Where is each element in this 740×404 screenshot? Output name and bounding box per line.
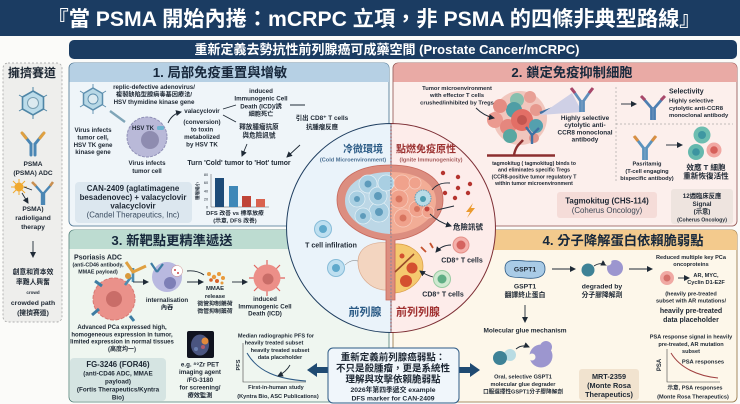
icon: effector T cells <box>688 126 722 160</box>
panel 3: new target precise delivery <box>69 230 389 402</box>
bar chart: DFS: (示意, DFS 改善) <box>213 217 257 225</box>
text: selectivity: monoclonal antibody <box>669 113 729 119</box>
text: effector T cells: 效應 T 細胞 <box>686 163 726 172</box>
text: PET imaging: /FG-3180 <box>187 377 214 384</box>
callout: 12-week signal: (示意) <box>694 206 710 216</box>
callout: 12-week signal <box>671 189 733 224</box>
callout: MRT-2359: (Monte Rosa <box>587 381 632 390</box>
text: radioligand therapy: PSMA) <box>22 206 44 213</box>
icon: degrader complex <box>582 258 623 276</box>
text: oral degrader: Oral, selective GSPT1 <box>494 374 552 380</box>
icon: CCR8 antibody <box>571 88 593 112</box>
panel 1: local immune reset <box>69 63 389 226</box>
text: danger signal: 危險訊號 <box>453 222 483 232</box>
arrow <box>232 281 247 283</box>
text: cold to hot: Turn 'Cold' tumor to 'Hot' tumor <box>187 160 291 167</box>
heading: cold: 冷微環境 <box>343 142 383 156</box>
text: PFS caption: data placeholder <box>258 355 303 361</box>
callout: Tagmokitug <box>557 192 657 218</box>
callout: Tagmokitug: (Coherus Oncology) <box>572 206 643 215</box>
label: prostate right: 前列列腺 <box>396 304 440 318</box>
arrow <box>420 271 433 277</box>
icon: lightning <box>466 203 475 218</box>
text: cold english: (Cold Microenvironment) <box>320 158 386 164</box>
icon: tumor cell with HSV TK <box>127 117 167 157</box>
text: oral degrader: 口服選擇性GSPT1分子膠降解劑 <box>483 388 563 396</box>
text: vector: HSV thymidine kinase gene <box>114 99 195 106</box>
icon: cell <box>660 271 674 285</box>
text: expression: limited expression in normal tissues <box>70 340 175 346</box>
arrow <box>168 112 181 123</box>
text: induced ICD: Death (ICD) <box>248 311 282 318</box>
text: tumor cell: tumor cell <box>132 168 162 175</box>
text: oral degrader: molecular glue degrader <box>491 382 556 388</box>
callout: 12-week signal: Signal <box>693 201 712 208</box>
arrow <box>621 103 636 105</box>
text: induced ICD: Death (ICD)/誘 <box>240 102 283 110</box>
bar chart: DFS: 40 <box>204 190 208 194</box>
text: valacyclovir: (conversion) <box>183 119 221 126</box>
text: virus infects: HSV TK gene <box>74 142 113 149</box>
icon: tumor cell with ADC <box>92 262 146 321</box>
text: highly selective: CCR8 monoclonal <box>557 129 613 136</box>
icon: syringe <box>110 111 125 122</box>
text: tumor microenvironment: crushed/inhibited by Tregs <box>420 100 494 106</box>
bar chart: DFS: 20 <box>204 198 208 202</box>
callout: FG-3246: Bio) <box>112 394 124 401</box>
icon: molecular glue <box>493 341 552 368</box>
text: Pasritamig: (T-cell engaging <box>625 169 669 175</box>
callout: MRT-2359: MRT-2359 <box>592 372 626 381</box>
callout: center message <box>328 348 459 403</box>
heading: 2. 鎖定免疫抑制細胞 <box>511 64 633 80</box>
text: highly selective: Highly selective <box>561 115 609 122</box>
text: PFS caption: Median radiographic PFS for <box>238 334 314 340</box>
text: PSA caption: subset <box>682 349 700 355</box>
title banner <box>0 0 740 36</box>
icon: prostate left lobe <box>358 243 388 290</box>
bar chart: DFS <box>194 173 269 225</box>
arrow <box>666 144 682 146</box>
subtitle bar <box>69 40 737 59</box>
text: expression: homogeneous expression in tumor, <box>71 332 173 338</box>
arrows: to T cell response <box>287 105 305 157</box>
text: valacyclovir: to toxin <box>191 126 213 133</box>
text: tumor microenvironment: with effector T cells <box>429 93 484 99</box>
text: induced ICD: induced <box>249 88 273 95</box>
text: radioligand therapy: radioligand <box>15 215 51 222</box>
text: Psoriasis ADC: MMAE payload) <box>78 270 118 276</box>
text: vector: replic-defective adenovirus/ <box>113 84 195 91</box>
icon: dying cell <box>249 260 285 296</box>
icon: Pasritamig antibody <box>634 136 656 160</box>
text: selectivity: cytolytic anti-CCR8 <box>669 106 724 112</box>
arrow <box>436 245 451 252</box>
arrow <box>552 268 575 270</box>
heading: 1. 局部免疫重置與增敏 <box>153 64 287 80</box>
arrow: right from callout <box>459 363 480 377</box>
callout: 12-week signal: (Coherus Oncology) <box>677 218 727 224</box>
icon: tumor cell with HSV TK: HSV TK <box>132 126 155 132</box>
icon: T cell <box>314 220 332 238</box>
text: crowded path: 率難人興奮 <box>16 277 50 286</box>
text: antigen release: 與危險訊號 <box>243 131 276 140</box>
arrow <box>133 281 148 283</box>
bar chart: DFS: 0 <box>206 206 208 210</box>
text: CD8 T cells lower: CD8⁺ T cells <box>422 292 464 298</box>
text: MMAE release: 微管抑制藥荷 <box>197 299 233 307</box>
text: PET imaging: 療效監測 <box>188 391 212 399</box>
text: PFS caption: heavily treated subset <box>245 341 304 347</box>
callout: FG-3246: (anti-CD46 ADC, MMAE <box>83 370 153 377</box>
text: reduced oncoproteins: Reduced multiple key PCa <box>656 255 726 261</box>
callout: Tagmokitug: Tagmokitug (CHS-114) <box>565 196 649 206</box>
text: internalisation: internalisation <box>146 297 188 304</box>
icon: stem and bar <box>487 140 555 156</box>
icon: selective antibody <box>641 96 665 120</box>
red signal dots <box>441 171 472 200</box>
callout: center message: DFS marker for CAN-2409 <box>351 396 435 402</box>
icon: T cell lower <box>328 260 358 276</box>
text: induced ICD: Immunogenic Cell <box>238 303 292 310</box>
text: CD8 response: 引出 CD8⁺ T cells <box>296 115 348 122</box>
center dashed line <box>390 124 392 332</box>
heading: 3. 新靶點更精準遞送 <box>111 232 233 248</box>
callout: FG-3246: payload) <box>105 378 131 385</box>
text: degraded by: degraded by <box>582 284 622 290</box>
panel: crowded race track: 擁擠賽道 <box>8 65 56 80</box>
text: CD8 T cells upper: CD8⁺ T cells <box>441 258 483 264</box>
icon: tumors in lobe <box>395 243 433 287</box>
callout: center message: 重新定義前列腺癌弱點： <box>341 352 445 364</box>
text: PSMA ADC: (PSMA) ADC <box>13 170 53 177</box>
bar chart: DFS: DFS 改善 vs 標準放療 <box>206 211 264 217</box>
text: PSA footnote: (Monte Rosa Therapeutics) <box>657 394 729 400</box>
central circle: prostate <box>287 124 495 332</box>
text: heavily pretreated: data placeholder <box>663 317 719 324</box>
text: heavily pretreated: (heavily pre-treated <box>665 292 717 298</box>
icon: bound antibody <box>526 108 553 144</box>
arrows: signal <box>430 183 454 226</box>
text: crowded path: 創意和資本效 <box>13 269 53 276</box>
text: virus infects: tumor cell, <box>77 134 109 141</box>
line chart: PSA: PSA <box>657 358 663 371</box>
text: vector: 複製缺陷型腺病毒基因療法/ <box>116 91 192 99</box>
text: virus infects: kinase gene <box>75 149 111 156</box>
text: highly selective: cytolytic anti- <box>564 122 606 129</box>
text: induced ICD: induced <box>253 296 277 303</box>
arrow <box>629 268 652 270</box>
arrows: to MMAE <box>187 271 204 282</box>
text: expression: (高度均一) <box>108 345 136 353</box>
icon: PSMA ADC antibody <box>22 133 44 155</box>
text: valacyclovir: metabolized <box>184 134 220 141</box>
subtitle bar: 重新定義去勢抗性前列腺癌可成藥空間 (Prostate Cancer/mCRPC) <box>194 42 580 57</box>
text: PSA caption: pre-treated, AR mutation <box>658 342 724 348</box>
text: T cell infiltration: T cell infilration <box>305 242 357 250</box>
text: Pasritamig: bispecific antibody) <box>620 176 674 182</box>
heading: ignite: 點燃免疫原性 <box>396 142 456 156</box>
text: MMAE release: MMAE <box>206 286 224 292</box>
text: PSMA ADC: PSMA <box>23 161 43 168</box>
text: Psoriasis ADC: (anti-CD46 antibody, <box>72 262 124 268</box>
text: degraded by: 分子膠降解劑 <box>582 290 623 299</box>
text: glue mechanism: Molecular glue mechanism <box>483 328 567 334</box>
text: first in human: (Kyntra Bio, ASC Publications) <box>237 394 319 400</box>
arrow <box>524 305 526 322</box>
text: virus infects: Virus infects <box>74 127 112 134</box>
text: first in human: First-in-human study <box>248 385 304 391</box>
panel: crowded race track <box>3 63 62 322</box>
text: CD8 response: 抗腫瘤反應 <box>306 122 339 131</box>
text: PSA footnote: 示意, PSA responses <box>667 386 723 392</box>
icon: internalisation cell <box>151 262 182 292</box>
text: GSPT1: GSPT1 <box>514 284 536 290</box>
text: tumor cell: Virus infects <box>128 160 166 167</box>
text: crowded path: crowd <box>26 290 40 295</box>
callout: FG-3246 <box>70 358 166 401</box>
arrow <box>678 277 689 279</box>
icon: GSPT1 protein <box>505 260 545 278</box>
callout: center message: 理解與攻擊依賴脆弱點 <box>345 374 441 386</box>
text: heavily pretreated: subset with AR mutations/ <box>656 299 726 305</box>
text: selectivity: Highly selective <box>669 98 714 104</box>
text: valacyclovir: valacyclovir <box>184 108 220 115</box>
text: PET imaging: imaging agent <box>179 369 221 376</box>
text: heavily pretreated: heavily pre-treated <box>660 308 722 315</box>
bar chart: DFS: 60 <box>204 181 208 185</box>
text: internalisation: 內吞 <box>161 304 174 312</box>
callout: FG-3246: (Fortis Therapeutics/Kyntra <box>77 386 160 393</box>
text: AR MYC: AR, MYC, <box>693 273 719 279</box>
icon: prostate right lobe <box>395 244 423 293</box>
panel 4: molecular glue <box>393 230 737 402</box>
icon: GSPT1 protein: GSPT1 <box>514 266 536 274</box>
text: induced ICD: 細胞死亡 <box>249 110 273 118</box>
text: Pasritamig: Pasritamig <box>632 162 662 168</box>
text: AR MYC: Cyclin D1-E2F <box>687 280 725 286</box>
text: tagmokitug mechanism: (CCR8-positive tumor regulatory T <box>492 174 577 180</box>
line chart: PFS: PFS <box>236 359 242 370</box>
icon: virus <box>80 84 106 114</box>
text: MMAE release: release <box>205 294 226 300</box>
text: antigen release: 釋放腫瘤抗原 <box>239 124 279 131</box>
callout: center message: 不只是殺腫瘤，更是系統性 <box>336 362 450 374</box>
callout: CAN-2409: besadenovec) + valacyclovir <box>80 193 186 202</box>
callout: CAN-2409: CAN-2409 (aglatimagene <box>87 184 179 193</box>
text: selectivity: Selectivity <box>669 88 704 96</box>
icon: PET scan <box>187 331 214 358</box>
callout: FG-3246: FG-3246 (FOR46) <box>86 360 150 369</box>
text: selectivity <box>669 88 729 119</box>
icon: red CD8 cell <box>453 237 469 253</box>
text: valacyclovir: by HSV TK <box>186 141 218 148</box>
text: radioligand therapy: therapy <box>21 224 45 231</box>
callout: MRT-2359: Therapeutics) <box>585 390 633 399</box>
text: tumor microenvironment: Tumor microenvironment <box>422 86 492 92</box>
arrow: left from callout <box>307 363 328 377</box>
text: PFS caption: heavily treated subset <box>251 348 310 354</box>
icon: virus <box>19 87 47 119</box>
callout: 12-week signal: 12週臨床反應 <box>683 193 721 200</box>
text: Psoriasis ADC: Psoriasis ADC <box>74 254 122 262</box>
text: ignite english: (Ignite Immunogenicity) <box>399 158 463 164</box>
bar chart: DFS: 80 <box>204 173 208 177</box>
bar chart: DFS: 腫瘤縮小 <box>194 182 201 200</box>
line chart: PFS <box>236 343 306 382</box>
label: prostate left: 前列腺 <box>348 304 382 318</box>
text: expression: Advanced PCa expressed high, <box>77 325 167 331</box>
callout: center message: 2026年第四季遞交 example <box>350 385 436 394</box>
text: reduced oncoproteins: oncoproteins <box>673 262 709 268</box>
heading: 4. 分子降解蛋白依賴脆弱點 <box>542 232 704 248</box>
text: crowded path: (擁擠賽道) <box>17 308 49 317</box>
icon: green CD8 cell <box>434 270 450 288</box>
text: tagmokitug mechanism: and eliminates specific Tregs <box>498 168 570 174</box>
callout: CAN-2409 <box>75 182 192 223</box>
line chart: PSA: PSA responses <box>682 360 724 366</box>
text: tagmokitug mechanism: within tumor microenvironment <box>494 181 573 187</box>
line chart: PSA <box>657 349 724 382</box>
panel 2: targeting immunosuppressive cells <box>393 63 737 226</box>
text: PET imaging: e.g. ⁸⁹Zr PET <box>181 362 219 368</box>
icon: MMAE payload <box>207 272 225 284</box>
arrow: down <box>32 241 34 257</box>
arrow: to tumor <box>476 108 494 118</box>
text: PSA caption: PSA response signal in heavily <box>650 334 732 340</box>
title banner: 『當 PSMA 開始內捲：mCRPC 立項，非 PSMA 的四條非典型路線』 <box>48 6 700 31</box>
icon: radioligand <box>11 179 53 205</box>
text: PET imaging: for screening/ <box>180 385 221 392</box>
arrows: valacyclovir outputs <box>223 105 247 156</box>
text: crowded path: crowded path <box>11 300 55 307</box>
text: highly selective: antibody <box>572 137 599 144</box>
text: effector T cells: 重新恢復活性 <box>683 170 729 180</box>
icon: zoom cone <box>540 93 582 115</box>
text: induced ICD: Immunogenic Cell <box>234 96 288 103</box>
icon: tumor cluster <box>487 91 547 145</box>
callout: CAN-2409: (Candel Therapeutics, Inc) <box>87 211 180 220</box>
callout: CAN-2409: valacyclovir <box>110 202 156 210</box>
text: GSPT1: 翻譯終止蛋白 <box>505 290 545 299</box>
icon: bladder <box>337 165 443 300</box>
text: tagmokitug mechanism: tagmokitug ( tagmokitug) binds to <box>492 161 576 167</box>
text: MMAE release: 微管抑制藥荷 <box>197 307 233 315</box>
callout: MRT-2359 <box>579 369 639 400</box>
